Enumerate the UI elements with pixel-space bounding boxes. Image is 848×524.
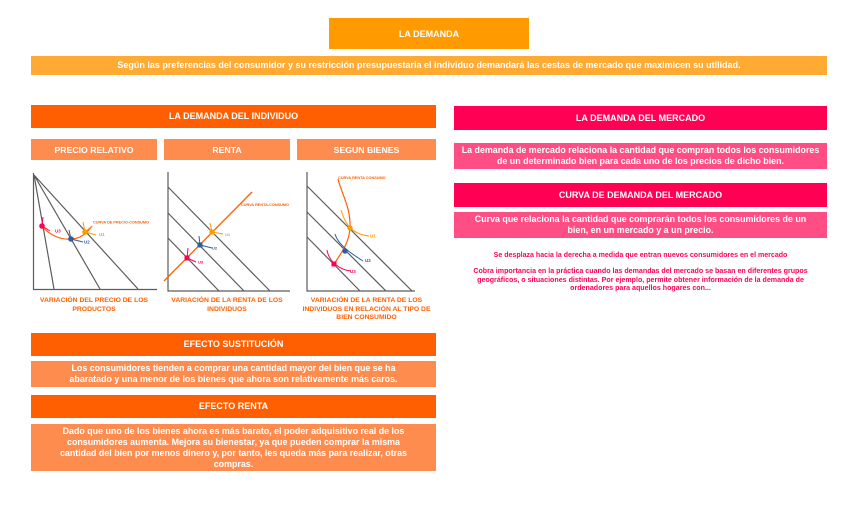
note: importancia: geográficos, o situaciones distintas. Por ejemplo, permite obtener información de la demanda de (477, 276, 804, 284)
text: efecto sustitución: Los consumidores tienden a comprar una cantidad mayor del bien que se ha (71, 363, 396, 373)
text: efecto renta (31, 424, 436, 471)
chart caption 3: BIEN CONSUMIDO (336, 314, 397, 321)
text: curva de demanda: bien, en un mercado y a un precio. (568, 225, 713, 235)
text: demanda de mercado: de un determinado bien para cada uno de los precios de dicho bien. (497, 156, 784, 166)
heading: la demanda del individuo: LA DEMANDA DEL INDIVIDUO (169, 111, 298, 121)
heading: efecto renta (31, 395, 436, 418)
text: demanda de mercado (454, 143, 827, 169)
subtitle banner: Según las preferencias del consumidor y su restricción presupuestaria el individuo demandará las cestas de mercado que maximicen su utilidad. (117, 60, 741, 70)
note: importancia: Cobra importancia en la práctica cuando las demandas del mercado se basan en diferentes grupos (473, 267, 808, 275)
chart: variación por tipo de bien: U1 (370, 234, 376, 238)
tab: segun bienes: SEGUN BIENES (334, 144, 399, 154)
text: curva de demanda: Curva que relaciona la cantidad que comprarán todos los consumidores de un (475, 214, 806, 224)
heading: efecto sustitución: EFECTO SUSTITUCIÓN (184, 339, 283, 349)
text: efecto renta: compras. (214, 458, 253, 468)
heading: efecto sustitución (31, 333, 436, 356)
chart caption 1: VARIACIÓN DEL PRECIO DE LOS (40, 297, 148, 304)
title (329, 18, 529, 49)
heading: curva de demanda (454, 183, 827, 207)
chart: variación por tipo de bien: CURVA RENTA CONSUMO (338, 176, 386, 180)
text: curva de demanda (454, 212, 827, 238)
tab: renta (164, 139, 290, 160)
text: efecto renta: Dado que uno de los bienes ahora es más barato, el poder adquisitivo real de los (63, 426, 404, 436)
text: efecto renta: cantidad del bien por menos dinero y, por tanto, les queda más para realizar, otras (60, 448, 407, 458)
heading: la demanda del mercado (454, 106, 827, 130)
chart caption 2: VARIACIÓN DE LA RENTA DE LOS (171, 297, 283, 304)
chart: variación del precio (32, 173, 157, 290)
chart: variación del precio: U3 (55, 228, 61, 234)
chart caption 3 (302, 296, 431, 321)
text: demanda de mercado: La demanda de mercado relaciona la cantidad que compran todos los consumidores (462, 145, 819, 155)
chart: variación del precio: U2 (84, 240, 90, 244)
tab: precio relativo: PRECIO RELATIVO (54, 144, 134, 154)
chart caption 1 (40, 296, 148, 312)
heading: la demanda del mercado: LA DEMANDA DEL MERCADO (576, 112, 705, 122)
chart: variación del precio: U1 (99, 232, 105, 237)
text: efecto sustitución (31, 361, 436, 387)
note: importancia (473, 267, 808, 292)
chart caption 2: INDIVIDUOS (207, 306, 247, 312)
note: importancia: ordenadores para aquellos hogares con... (570, 284, 711, 292)
text: efecto renta: consumidores aumenta. Mejora su bienestar, ya que pueden comprar la misma (67, 436, 400, 446)
chart caption 1: PRODUCTOS (72, 306, 116, 312)
chart: variación por tipo de bien (306, 172, 415, 292)
heading: curva de demanda: CURVA DE DEMANDA DEL MERCADO (559, 190, 722, 200)
chart caption 3: INDIVIDUOS EN RELACIÓN AL TIPO DE (302, 306, 431, 312)
heading: efecto renta: EFECTO RENTA (199, 401, 268, 411)
chart: variación de la renta: U3 (198, 260, 204, 264)
tab: segun bienes (297, 139, 436, 160)
chart caption 2 (171, 296, 283, 312)
chart: variación del precio: CURVA DE PRECIO-CONSUMO (93, 220, 149, 224)
chart: variación de la renta (164, 172, 290, 292)
chart caption 3: VARIACIÓN DE LA RENTA DE LOS (311, 297, 422, 304)
tab: precio relativo (31, 139, 157, 160)
chart: variación de la renta: U1 (225, 232, 231, 237)
text: efecto sustitución: abaratado y una menor de los bienes que ahora son relativamente más caros. (70, 374, 398, 384)
chart: variación por tipo de bien: U2 (365, 258, 371, 263)
heading: la demanda del individuo (31, 105, 436, 128)
chart: variación de la renta: CURVA RENTA-CONSUMO (241, 203, 289, 207)
chart: variación por tipo de bien: U3 (350, 269, 356, 274)
chart: variación de la renta: U2 (212, 246, 218, 250)
subtitle banner (31, 56, 827, 75)
title: LA DEMANDA (399, 29, 459, 39)
note: desplazamiento: Se desplaza hacia la derecha a medida que entran nuevos consumidores en el mercado (494, 252, 787, 259)
tab: renta: RENTA (212, 144, 242, 154)
